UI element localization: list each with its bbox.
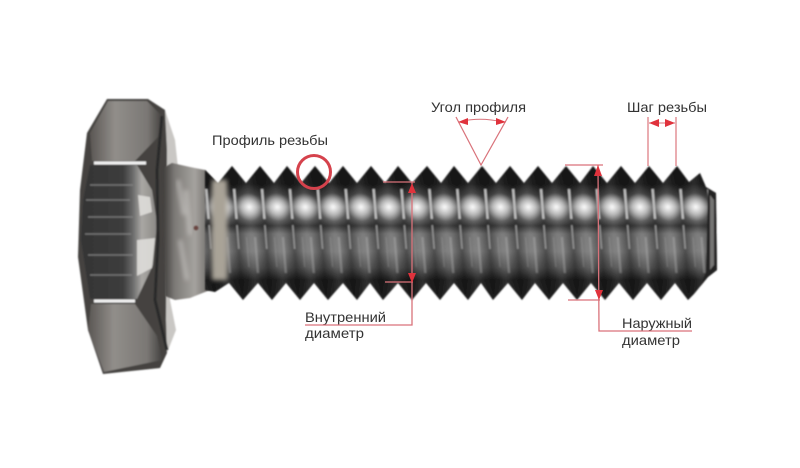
facet highlights (94, 163, 146, 301)
bolt photo illustration (78, 99, 720, 374)
label: inner diameter: диаметр (305, 325, 364, 341)
label: inner diameter (305, 182, 416, 341)
head outline (78, 99, 167, 374)
label: inner diameter: Внутренний (305, 309, 386, 325)
thread profile circle marker (298, 156, 330, 188)
label: outer diameter: диаметр (622, 332, 680, 348)
pitch extension lines (648, 117, 676, 166)
label: outer diameter: Наружный (622, 315, 692, 331)
top facet of head (90, 101, 162, 161)
label: thread profile (212, 132, 330, 188)
bolt neck (163, 163, 216, 300)
beige thread run-out band (212, 180, 227, 280)
label: outer diameter (565, 165, 692, 348)
facet bright scratches (137, 195, 155, 276)
pitch arrows (649, 119, 675, 127)
bolt head (78, 99, 178, 374)
outer diameter dimension lines (565, 165, 692, 331)
label: thread pitch (627, 99, 707, 166)
angle arc with arrows (458, 118, 506, 125)
inner diameter arrows (408, 183, 416, 283)
horizontal machining marks (85, 185, 133, 275)
shaft end chamfer (700, 188, 718, 286)
label: profile angle: Угол профиля (431, 99, 526, 115)
label: thread pitch: Шаг резьбы (627, 99, 707, 115)
threaded shaft (200, 160, 720, 305)
angle construction lines (456, 117, 508, 165)
label: thread profile: Профиль резьбы (212, 132, 328, 148)
dark shoulder line (155, 116, 167, 350)
head flange (140, 102, 178, 370)
label: profile angle (431, 99, 526, 165)
outer diameter arrows (594, 165, 603, 300)
bottom facet of head (88, 304, 162, 372)
inner diameter dimension lines (305, 182, 415, 325)
central facet of head (81, 165, 157, 299)
neck rust speck (194, 226, 198, 230)
neck mottled highlights (178, 180, 190, 280)
